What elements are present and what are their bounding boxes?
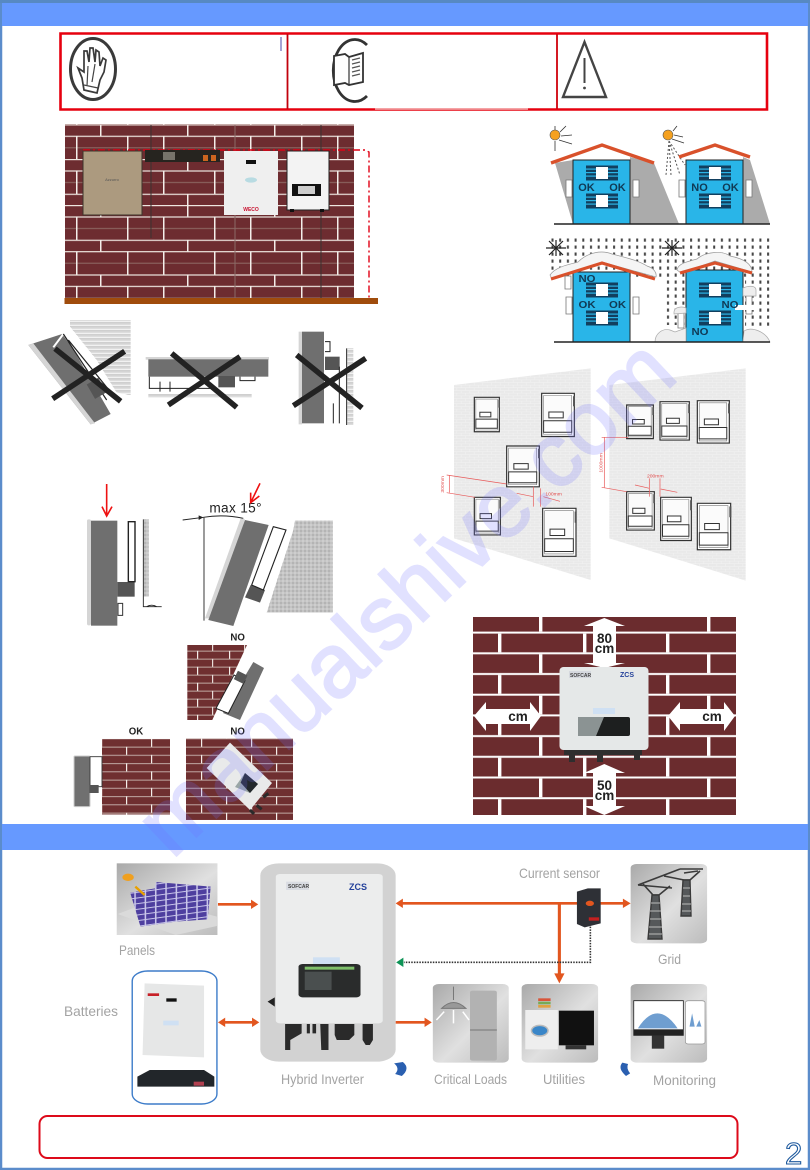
cross [293,355,366,408]
icon: wifi inverter [394,1062,407,1076]
label: 1000mm: 1000mm [598,453,604,473]
watermark: manualshive.com [117,320,694,875]
house: snow left: OK [578,300,596,311]
hybrid inverter [260,863,396,1062]
clearance dashed line [83,150,369,298]
dotted signal line [404,927,590,962]
current sensor [577,888,601,927]
house: left shade OK: OK [578,182,595,194]
arrow: top clearance [584,618,625,668]
dimension lines [447,475,560,507]
green arrow head [396,958,403,967]
falling snow [549,237,770,329]
arrow: right clearance: cm [702,709,722,724]
icon: grid towers [638,869,703,939]
label: 200mm: 200mm [647,474,664,480]
rack battery [145,150,220,162]
section band: system diagram [2,824,808,850]
icon: snowflake right [662,240,682,256]
label: Monitoring: Monitoring [653,1072,716,1088]
icon: warning triangle [563,42,606,97]
correct mount: vertical [87,484,162,626]
wrong mount: flat [146,353,269,407]
inverter [287,151,329,212]
label: Grid: Grid [658,951,681,967]
floor [64,298,378,304]
wrong mount: tilted forward [28,320,131,424]
wrong mount: overhanging wall [187,632,264,720]
house: snow right: NO [722,300,739,311]
batteries [132,971,217,1104]
inverter photo [560,667,648,762]
wrong mounting rotated inverter [186,727,293,820]
cross [53,349,125,401]
label: 300mm: 300mm [440,476,446,493]
tan battery: Azzurro [105,177,120,182]
inverter photo: SOFCAR [570,673,592,679]
label: max 15: max 15° [209,500,262,515]
wrong mountings and correct tilt diagrams [28,320,366,820]
house: right sun NO: OK [722,182,739,194]
house: snow left: NO [578,274,596,285]
arrow: right clearance [668,702,735,731]
red arrow [251,483,260,503]
label: Current sensor: Current sensor [519,865,600,881]
cross [168,353,240,407]
brand on inverter: ZCS [349,882,367,892]
tile: panels [117,863,217,935]
house: snow left [550,252,656,342]
label: 100mm: 100mm [545,492,562,498]
arrow: grid and inverter [396,899,631,908]
red arrow [102,484,112,516]
label: Hybrid Inverter: Hybrid Inverter [281,1071,364,1087]
house: left shade OK [550,126,679,224]
arrow: bottom clearance: 50 [597,778,612,793]
arrow: panels to inverter [218,900,258,909]
icon: wifi monitoring [620,1063,630,1076]
arrow: down to utilities [554,903,565,983]
tile: utilities [522,984,598,1063]
arrow: left clearance [474,702,541,731]
correct mount: tilted max 15 degrees [183,483,333,626]
wall with batteries and inverter [64,124,378,304]
ground line [554,223,770,225]
left wall diagram [440,368,591,580]
arrow: batteries to inverter [218,1018,259,1027]
icon: read manual [333,39,367,102]
house: right sun NO: NO [691,182,708,194]
icon: gloves [70,38,116,100]
brick wall [473,617,736,815]
label: NO: NO [230,632,245,643]
red note box [40,1116,738,1158]
label: Utilities: Utilities [543,1071,585,1087]
tile: critical loads [433,984,509,1063]
header band: installation [0,0,810,26]
arrow: top clearance: cm [595,641,614,656]
arrow: bottom clearance: cm [595,788,614,803]
panel: safety symbols [60,34,767,110]
white battery [224,151,278,215]
label: Batteries: Batteries [64,1003,118,1019]
tan battery [83,151,142,215]
arrow: left clearance: cm [508,709,528,724]
house: snow right: NO [692,327,709,338]
inverter clearance diagram [473,617,736,815]
clearance between inverters diagrams [440,368,746,581]
correct wall mounting side view [74,727,170,814]
house: left shade OK: OK [609,182,626,194]
tile: monitoring [631,984,707,1063]
icon: snowflake left [546,240,566,256]
house: snow right [655,252,770,342]
label: NO: NO [230,727,245,738]
brand on inverter: SOFCAR [288,884,310,890]
right wall diagram [598,368,746,581]
tile: grid tower [631,864,707,943]
label: Critical Loads: Critical Loads [434,1071,507,1087]
arrows [218,899,631,1027]
brand on inverter [288,882,367,892]
wrong mount: backward [293,332,366,425]
white battery: WECO [243,207,259,213]
inverter photo: ZCS [620,672,634,679]
arrow: bottom clearance [584,764,625,815]
system diagram [64,863,716,1104]
page number: 2 [785,1136,802,1170]
brick wall [65,124,354,298]
ground line [554,341,770,343]
label: Panels: Panels [119,942,155,958]
house: right sun NO [663,126,770,224]
label: OK: OK [129,727,143,738]
house: snow left: OK [609,300,627,311]
arrow: top clearance: 80 [597,631,612,646]
dimension lines [602,437,677,497]
arrow: inverter to critical loads [396,1018,432,1027]
snow diagram: houses [546,237,770,342]
sun shade diagram: houses [550,126,770,224]
